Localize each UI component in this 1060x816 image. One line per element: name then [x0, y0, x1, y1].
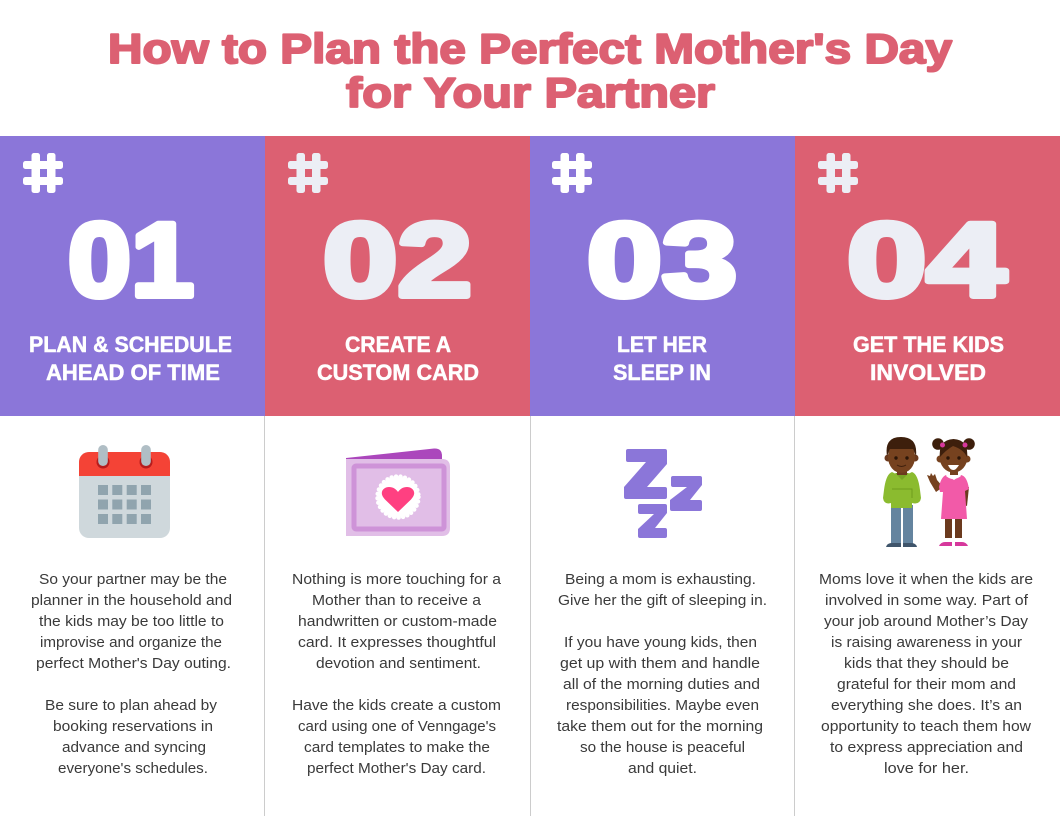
- icon: sleeping Zzz: [624, 449, 702, 538]
- text: step 02 body: handwritten or custom-made: [298, 614, 497, 630]
- panel: step 01 header: [0, 136, 265, 416]
- icon: calendar: [79, 445, 170, 538]
- text: step 04 body: involved in some way. Part of: [825, 593, 1029, 609]
- text: step 04 body: everything she does. It’s an: [831, 698, 1022, 714]
- text: step 03 body: so the house is peaceful: [580, 740, 745, 756]
- heading: step 02: [317, 332, 479, 385]
- text: step 03 body: take them out for the morning: [557, 719, 763, 735]
- boy: [883, 437, 921, 547]
- number 03: 03: [587, 202, 737, 319]
- icon: hash: [288, 153, 328, 193]
- text: step 01 body: everyone's schedules.: [58, 761, 208, 777]
- girl: [927, 438, 975, 546]
- text: step 01 body: So your partner may be the: [39, 572, 227, 588]
- text: step 02 body: Mother than to receive a: [312, 593, 482, 609]
- icon: hash: [23, 153, 63, 193]
- panel: step 04 header: [795, 136, 1060, 416]
- heading: step 04: [853, 332, 1004, 385]
- heading: step 01: PLAN & SCHEDULE: [29, 332, 232, 357]
- text: step 02 body: card templates to make the: [304, 740, 490, 756]
- text: step 03 body: [557, 572, 767, 777]
- text: step 01 body: improvise and organize the: [40, 635, 222, 651]
- panel: step 02 header: [265, 136, 530, 416]
- text: step 04 body: kids that they should be: [844, 656, 1009, 672]
- text: step 02 body: [292, 572, 502, 777]
- title: for Your Partner: [346, 69, 715, 116]
- text: step 04 body: to express appreciation and: [830, 740, 1023, 756]
- text: step 04 body: grateful for their mom and: [837, 677, 1016, 693]
- text: step 03 body: If you have young kids, then: [564, 635, 757, 651]
- text: step 02 body: card. It expresses thoughtful: [298, 635, 496, 651]
- heading: step 04: GET THE KIDS: [853, 332, 1004, 357]
- icon: two children: [883, 437, 975, 547]
- text: step 03 body: Being a mom is exhausting.: [565, 572, 756, 588]
- number 02: 02: [323, 202, 472, 319]
- text: step 02 body: Have the kids create a custom: [292, 698, 501, 714]
- text: step 01 body: Be sure to plan ahead by: [45, 698, 218, 714]
- heading: step 03: [613, 332, 711, 385]
- text: step 03 body: all of the morning duties and: [563, 677, 760, 693]
- heading: step 04: INVOLVED: [870, 360, 986, 385]
- icon: hash: [818, 153, 858, 193]
- icon: greeting card: [346, 448, 450, 536]
- text: step 01 body: planner in the household and: [31, 593, 232, 609]
- icon: hash: [552, 153, 592, 193]
- text: step 01 body: perfect Mother's Day outing.: [36, 656, 231, 672]
- heading: step 03: LET HER: [617, 332, 707, 357]
- text: step 03 body: Give her the gift of sleeping in.: [558, 593, 767, 609]
- text: step 02 body: perfect Mother's Day card.: [307, 761, 486, 777]
- title: How to Plan the Perfect Mother's Day: [108, 25, 953, 72]
- text: step 02 body: card using one of Venngage's: [298, 719, 496, 735]
- text: step 03 body: responsibilities. Maybe even: [566, 698, 759, 714]
- text: step 04 body: is raising awareness in your: [831, 635, 1022, 651]
- text: step 01 body: [31, 572, 232, 777]
- text: step 04 body: opportunity to teach them how: [821, 719, 1032, 735]
- text: step 04 body: Moms love it when the kids are: [819, 572, 1033, 588]
- heading: step 02: CUSTOM CARD: [317, 360, 479, 385]
- heading: step 03: SLEEP IN: [613, 360, 711, 385]
- panel: step 03 header: [530, 136, 795, 416]
- number 01: 01: [68, 202, 194, 319]
- text: step 04 body: your job around Mother’s Day: [824, 614, 1029, 630]
- heading: step 01: [29, 332, 232, 385]
- text: step 03 body: get up with them and handle: [560, 656, 760, 672]
- heading: step 02: CREATE A: [345, 332, 451, 357]
- text: step 02 body: Nothing is more touching for a: [292, 572, 502, 588]
- text: step 01 body: advance and syncing: [62, 740, 206, 756]
- heading: step 01: AHEAD OF TIME: [46, 360, 220, 385]
- text: step 01 body: the kids may be too little to: [39, 614, 224, 630]
- number 04: 04: [847, 202, 1006, 319]
- text: step 01 body: booking reservations in: [53, 719, 213, 735]
- text: step 04 body: love for her.: [884, 761, 969, 777]
- title: [108, 25, 953, 116]
- text: step 04 body: [819, 572, 1033, 777]
- text: step 03 body: and quiet.: [628, 761, 697, 777]
- text: step 02 body: devotion and sentiment.: [316, 656, 481, 672]
